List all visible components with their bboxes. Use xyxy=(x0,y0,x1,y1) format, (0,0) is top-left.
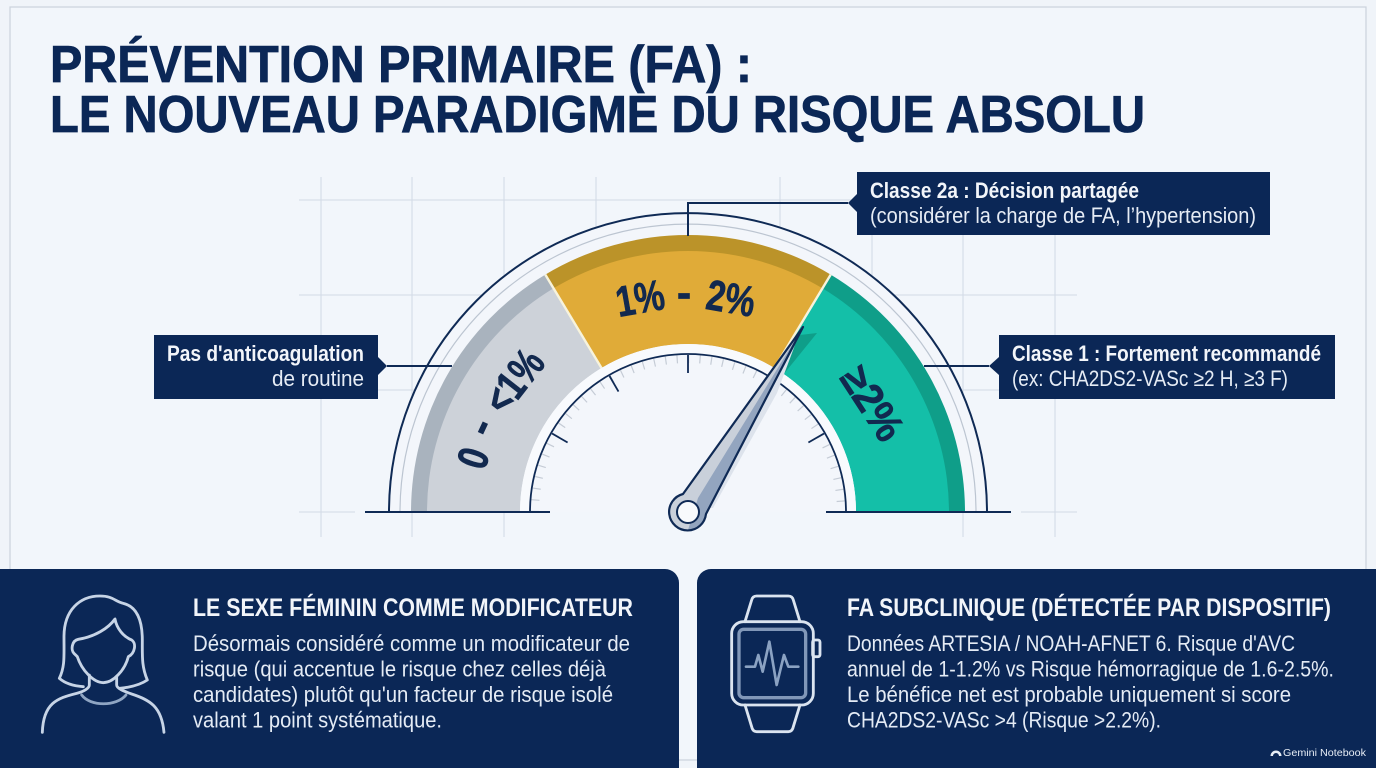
needle xyxy=(669,327,803,530)
icon: smartwatch xyxy=(732,596,820,732)
panel: FA subclinique xyxy=(697,569,1376,768)
callout: classe 1: Classe 1 : Fortement recommandé xyxy=(1012,341,1321,366)
title: LE NOUVEAU PARADIGME DU RISQUE ABSOLU xyxy=(50,86,1145,144)
text block: FA subclinique: Le bénéfice net est probable uniquement si score xyxy=(847,682,1291,707)
callout: pas d'anticoagulation: Pas d'anticoagulation xyxy=(167,341,364,366)
callout: pas d'anticoagulation: de routine xyxy=(272,366,364,391)
callout: classe 2a xyxy=(688,172,1270,236)
callout: classe 2a: (considérer la charge de FA, l’hypertension) xyxy=(870,203,1256,228)
callout: classe 2a: Classe 2a : Décision partagée xyxy=(870,178,1139,203)
callout: classe 1 xyxy=(924,335,1335,399)
text block: FA subclinique: Données ARTESIA / NOAH-AFNET 6. Risque d'AVC xyxy=(847,631,1295,656)
callout: classe 1: (ex: CHA2DS2-VASc ≥2 H, ≥3 F) xyxy=(1012,366,1288,391)
segment: yellow 1% - 2% xyxy=(545,235,831,368)
text block: sexe féminin: risque (qui accentue le risque chez celles déjà xyxy=(193,656,607,682)
text block: sexe féminin: candidates) plutôt qu'un facteur de risque isolé xyxy=(193,682,613,707)
segment: teal ≥2% xyxy=(774,275,965,512)
segment: grey 0 - <1% xyxy=(411,275,602,512)
text block: sexe féminin xyxy=(193,631,630,732)
segment: yellow 1% - 2%: 2% xyxy=(703,271,759,327)
callout: pas d'anticoagulation xyxy=(154,335,452,399)
text block: sexe féminin: Désormais considéré comme un modificateur de xyxy=(193,631,630,656)
baseline xyxy=(365,511,1011,513)
gauge xyxy=(365,213,1011,530)
title xyxy=(50,36,1145,144)
text block: sexe féminin: valant 1 point systématique. xyxy=(193,708,442,732)
segment: yellow 1% - 2%: 1% xyxy=(612,271,668,327)
segment: grey 0 - <1%: 0 xyxy=(448,442,500,475)
segment: grey 0 - <1%: <1% xyxy=(475,340,555,423)
heading: sexe féminin: LE SEXE FÉMININ COMME MODIFICATEUR xyxy=(193,593,633,622)
title: PRÉVENTION PRIMAIRE (FA) : xyxy=(50,36,752,94)
segment: grey 0 - <1%: - xyxy=(456,410,505,443)
panel: sexe féminin xyxy=(0,569,679,768)
text block: FA subclinique xyxy=(847,631,1334,732)
segment: yellow 1% - 2%: - xyxy=(677,269,691,317)
scale ticks xyxy=(530,354,846,512)
text block: FA subclinique: CHA2DS2-VASc >4 (Risque >2.2%). xyxy=(847,708,1161,732)
segment: teal ≥2%: ≥2% xyxy=(831,357,914,450)
icon: woman xyxy=(42,596,164,732)
watermark: Gemini Notebook: Gemini Notebook xyxy=(1283,747,1367,759)
